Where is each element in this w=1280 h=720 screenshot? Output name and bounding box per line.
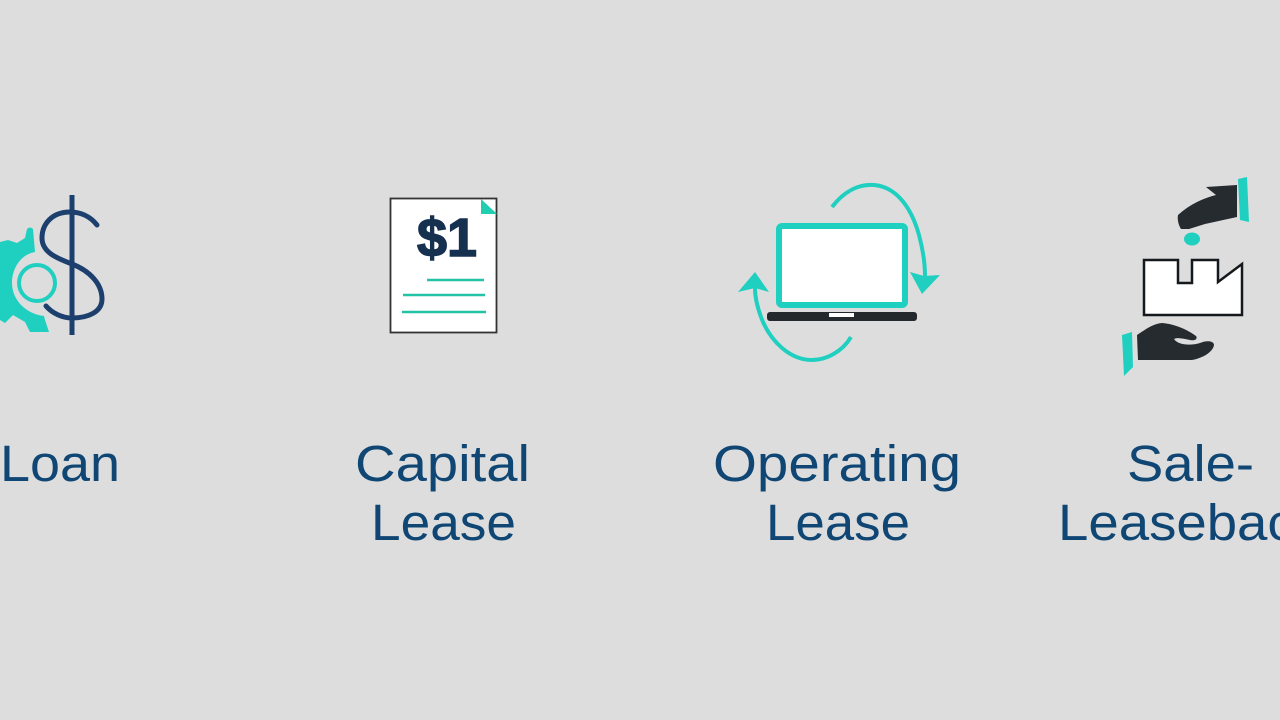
- label: Capital Lease: Lease: [371, 494, 516, 551]
- icon: document with $1: [390, 198, 497, 332]
- icon: laptop with circular arrows: [738, 185, 940, 360]
- label: Loan: Loan: [0, 435, 120, 492]
- panel: operating lease: [713, 185, 961, 551]
- label: Capital Lease: Capital: [355, 435, 530, 492]
- panel: sale-leaseback: [1058, 177, 1280, 551]
- label: Operating Lease: [713, 435, 961, 551]
- panel: capital lease: [355, 198, 530, 551]
- icon: hands exchanging a factory: [1122, 177, 1249, 376]
- label: Sale-Leaseback: [1058, 435, 1280, 551]
- label: Sale-Leaseback: Sale-: [1127, 435, 1254, 492]
- icon: document with $1: $1: [417, 208, 477, 268]
- label: Operating Lease: Operating: [713, 435, 961, 492]
- panel: loan: [0, 195, 120, 492]
- label: Operating Lease: Lease: [766, 494, 910, 551]
- icon: gear and dollar sign: [0, 195, 102, 335]
- label: Capital Lease: [355, 435, 530, 551]
